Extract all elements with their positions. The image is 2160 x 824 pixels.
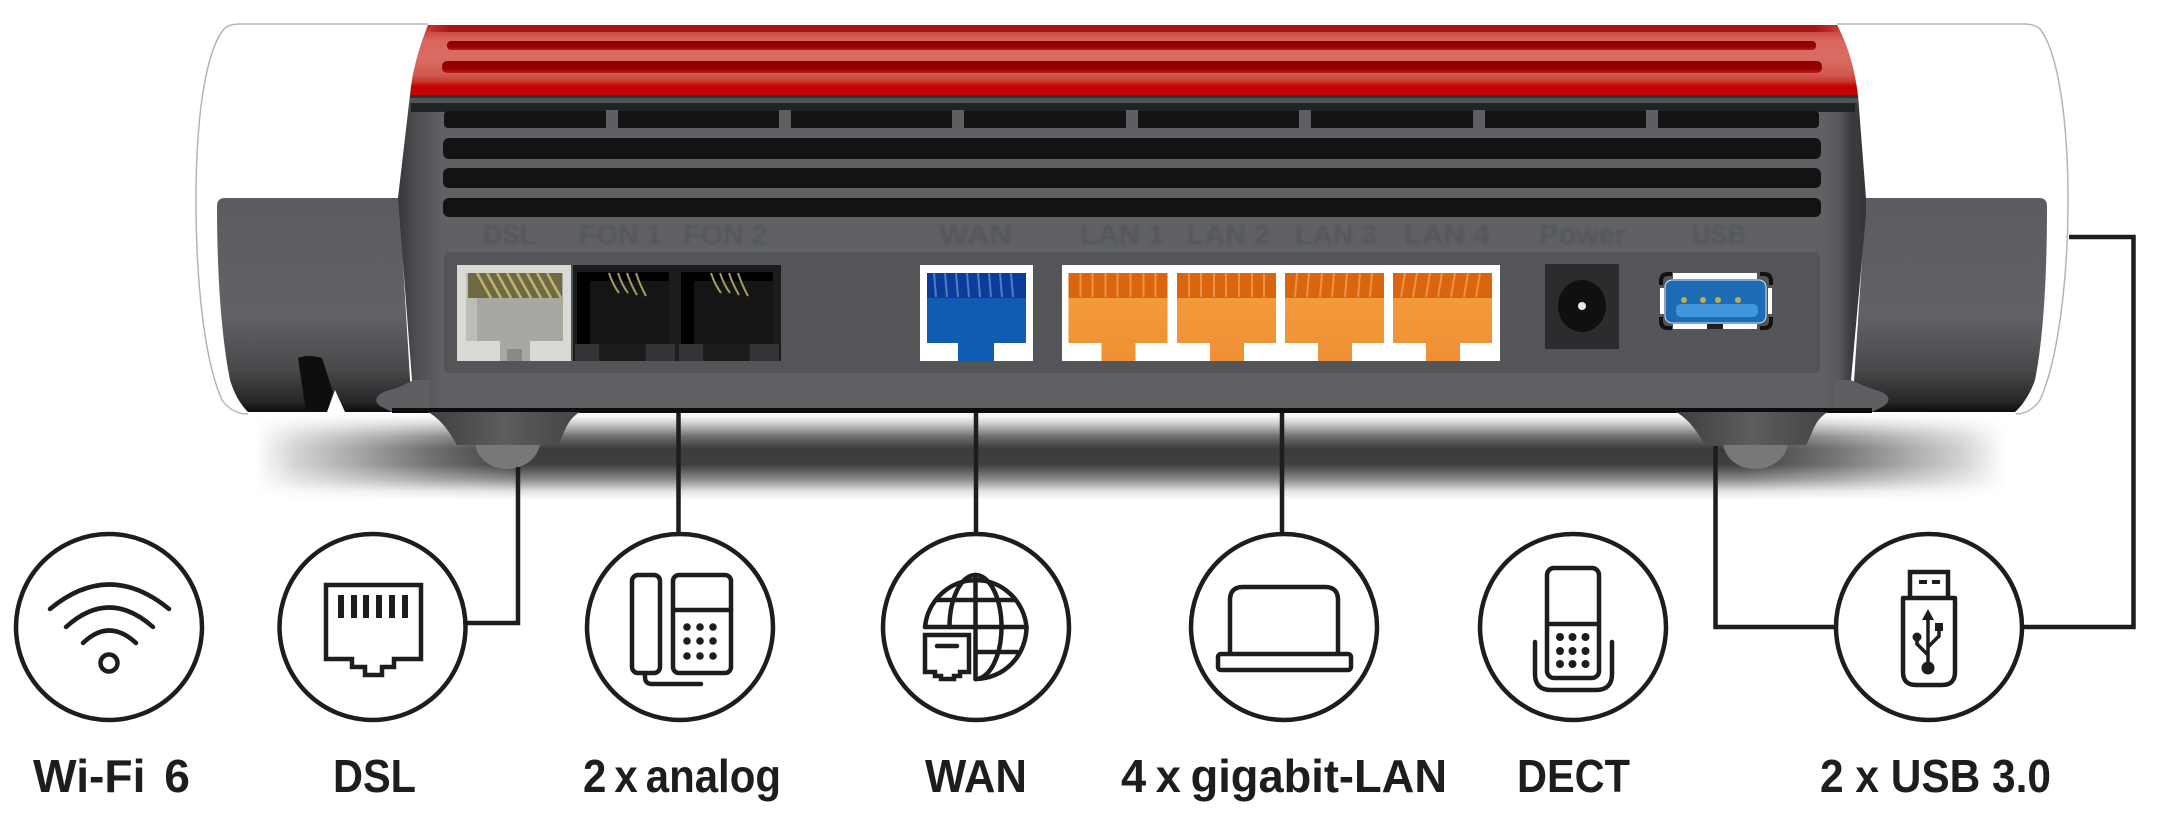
right cap outer edge (1837, 24, 2068, 414)
power socket (1545, 264, 1619, 349)
line: USB left (1716, 446, 1835, 627)
faint port labels: LAN 1 (1080, 219, 1164, 250)
icon: Wi-Fi (16, 534, 202, 720)
icon: DSL socket (280, 534, 466, 720)
line: LAN (1280, 413, 1284, 532)
router: photo of the rear of the device (196, 24, 2068, 500)
line: analog (676, 413, 681, 532)
LAN 1 (1068, 273, 1168, 361)
right white end cap (1837, 24, 2068, 414)
USB port (1660, 273, 1772, 329)
label: DSL: DSL (333, 750, 416, 802)
left cap outer edge (196, 24, 428, 414)
LAN ports (1062, 265, 1500, 361)
line: WAN (974, 413, 978, 532)
faint port labels: FON 2 (683, 219, 768, 250)
WAN port (920, 265, 1033, 361)
icon: laptop (1191, 534, 1377, 720)
LAN 2 (1177, 273, 1276, 361)
faint port labels: LAN 4 (1404, 219, 1490, 250)
faint port labels: WAN (939, 219, 1012, 250)
line: USB right (2023, 237, 2134, 627)
label: DECT: DECT (1517, 750, 1630, 802)
floor shadow (255, 412, 2005, 500)
label: WAN: WAN (925, 750, 1027, 802)
line: DSL (467, 467, 518, 623)
label: 2 x analog: 2 x analog (583, 750, 781, 802)
dark rim under red band (410, 95, 1858, 98)
icon: DECT handset (1480, 534, 1666, 720)
label: 2 x USB 3.0: 2 x USB 3.0 (1820, 750, 2051, 802)
port panel (444, 252, 1820, 373)
LAN 3 (1285, 273, 1384, 361)
faint port labels: Power (1539, 219, 1626, 250)
faint port labels: USB (1692, 219, 1746, 250)
main body (398, 95, 1866, 412)
faint port labels: DSL (483, 219, 536, 250)
FON 1 port (573, 265, 677, 361)
label: Wi-Fi 6: Wi-Fi 6 (33, 750, 190, 802)
faint port labels: FON 1 (579, 219, 662, 250)
faint port labels: LAN 2 (1187, 219, 1270, 250)
right grey side block (1852, 198, 2047, 412)
FON 2 port (677, 265, 781, 361)
label: 4 x gigabit-LAN: 4 x gigabit-LAN (1121, 750, 1447, 802)
left base flare (376, 380, 430, 412)
icon: WAN globe (883, 534, 1069, 720)
faint port labels (483, 219, 1746, 250)
body bottom edge (392, 408, 1872, 413)
left foot (428, 412, 580, 469)
left grey side block (217, 198, 412, 412)
left white end cap (196, 24, 428, 414)
LAN 4 (1393, 273, 1492, 361)
icon: USB stick (1836, 534, 2022, 720)
ventilation slots (443, 110, 1821, 217)
faint port labels: LAN 3 (1295, 219, 1377, 250)
right foot (1676, 412, 1828, 469)
left cable clip (298, 356, 345, 412)
icon: analog telephone (587, 534, 773, 720)
connector lines (467, 237, 2134, 627)
DSL port (457, 265, 571, 361)
red top band (410, 25, 1858, 96)
right base flare (1835, 380, 1889, 412)
